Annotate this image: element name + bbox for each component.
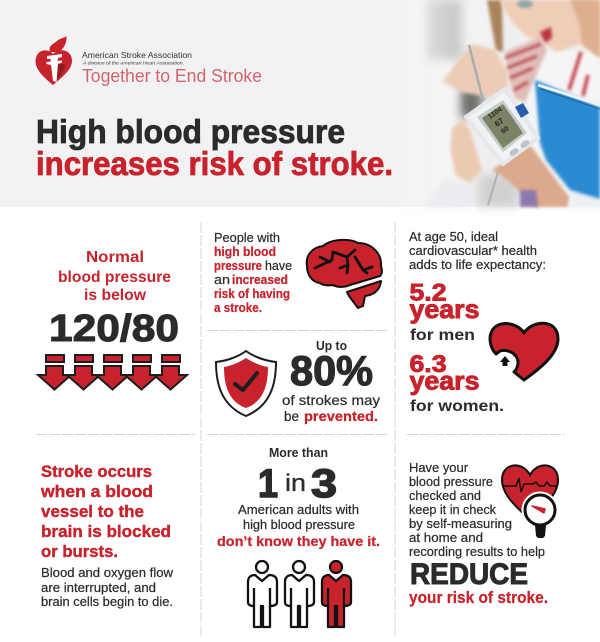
text: of strokes may be prevented: be xyxy=(284,408,299,424)
text: stroke occurs when: when a blood xyxy=(40,482,153,501)
text: of strokes may be prevented xyxy=(282,392,380,424)
logo tagline small: A division of the American Heart Association. xyxy=(82,60,184,66)
stat: 5.2 years for men xyxy=(410,280,480,344)
text: people with high blood pressure: high blood xyxy=(214,244,276,259)
panel: life expectancy xyxy=(409,229,558,415)
text: people with high blood pressure: have xyxy=(265,258,292,273)
icon: heart and torch xyxy=(36,36,72,85)
text: blood and oxygen: are interrupted, and xyxy=(41,580,156,595)
stat: 5.2 years for men: 5.2 xyxy=(410,280,446,306)
face xyxy=(499,0,600,58)
red stethoscope xyxy=(569,52,588,96)
monitor badge xyxy=(515,103,529,118)
lower right hand xyxy=(492,145,570,207)
text: american adults: high blood pressure xyxy=(243,517,355,532)
text: have your blood pressure checked: recording results to help xyxy=(409,544,545,559)
blue folder xyxy=(535,80,600,199)
text: american adults: don’t know they have it. xyxy=(217,533,380,549)
number: 1 in 3: in xyxy=(285,470,306,497)
monitor buttons xyxy=(508,147,520,157)
icon: brain xyxy=(307,240,382,308)
icon: down arrows xyxy=(38,355,187,390)
panel: stroke definition xyxy=(40,462,174,609)
text: more than: More than xyxy=(269,445,328,460)
text: stroke occurs when: Stroke occurs xyxy=(41,462,152,481)
text: people with high blood pressure: risk of having xyxy=(214,286,290,301)
text: have your blood pressure checked xyxy=(409,460,545,559)
icon: heart with arrow xyxy=(490,323,558,380)
text: blood and oxygen: brain cells begin to die. xyxy=(41,594,173,609)
stat: 6.3 years for women xyxy=(410,351,504,415)
stat: 6.3 years for women: years xyxy=(410,366,480,396)
header background xyxy=(0,0,600,207)
logo: American Stroke Association xyxy=(36,36,262,86)
striped model xyxy=(505,37,547,102)
title xyxy=(36,113,393,182)
cable xyxy=(488,172,498,205)
panel: self-measuring xyxy=(409,460,558,607)
text: people with high blood pressure: an xyxy=(214,272,230,287)
column and row dividers xyxy=(36,222,565,636)
text: normal blood pressure is below: is below xyxy=(84,287,147,304)
photo: woman holding blood pressure monitor xyxy=(390,0,600,207)
number: 80%: 80% xyxy=(290,347,373,394)
panel: normal blood pressure xyxy=(38,249,187,390)
stat: 5.2 years for men: for men xyxy=(410,327,475,344)
stat: 5.2 years for men: years xyxy=(410,294,480,324)
lower left hand xyxy=(450,120,482,183)
text: have your blood pressure checked: checked and xyxy=(409,488,481,503)
text: normal blood pressure is below xyxy=(58,249,171,304)
upper hand xyxy=(442,44,508,97)
photo: woman holding blood pressure monitor: 60 xyxy=(500,125,511,136)
text: stroke occurs when: or bursts. xyxy=(41,542,118,561)
photo: woman holding blood pressure monitor: 1104 xyxy=(487,106,504,121)
text: of strokes may be prevented: prevented. xyxy=(304,408,378,424)
text: your risk of stroke: your risk of stroke. xyxy=(409,588,548,607)
text: american adults xyxy=(217,502,380,549)
text: people with high blood pressure: increased xyxy=(232,272,288,287)
title: High blood pressure xyxy=(36,113,345,150)
text: of strokes may be prevented: of strokes may xyxy=(282,392,380,408)
panel: 1 in 3 xyxy=(217,445,380,627)
text: have your blood pressure checked: by self-measuring xyxy=(409,516,512,531)
text: stroke occurs when xyxy=(40,462,171,561)
text: have your blood pressure checked: Have your xyxy=(409,460,469,475)
icon: shield with check xyxy=(216,351,276,416)
text: people with high blood pressure: pressure xyxy=(214,258,262,273)
text: american adults: American adults with xyxy=(238,502,359,517)
text: up to: Up to xyxy=(316,338,347,353)
panel: increased risk xyxy=(214,230,382,315)
icon: three people xyxy=(248,561,351,627)
title: increases risk of stroke. xyxy=(36,145,393,182)
text: blood and oxygen xyxy=(41,565,174,609)
text: normal blood pressure is below: Normal xyxy=(86,249,144,266)
coat xyxy=(525,50,600,207)
photo: woman holding blood pressure monitor: 67 xyxy=(493,116,506,129)
text: have your blood pressure checked: at home and xyxy=(409,530,483,545)
logo wordmark: American Stroke Association xyxy=(82,50,192,60)
number: 1 in 3: 3 xyxy=(311,462,337,506)
stat: 6.3 years for women: 6.3 xyxy=(410,351,446,378)
icon: heart with gauge xyxy=(502,465,558,538)
monitor body xyxy=(466,89,538,164)
text: at age 50 intro: adds to life expectancy: xyxy=(409,257,546,272)
number: 1 in 3: 1 xyxy=(258,462,278,506)
text: normal blood pressure is below: blood pressure xyxy=(58,269,171,286)
panel: 80 percent preventable xyxy=(216,338,380,424)
text: at age 50 intro: cardiovascular* health xyxy=(409,243,537,258)
text: reduce: REDUCE xyxy=(410,558,528,591)
text: stroke occurs when: brain is blocked xyxy=(41,522,171,541)
text: at age 50 intro xyxy=(409,229,546,272)
text: people with high blood pressure xyxy=(214,230,292,315)
number: 120/80: 120/80 xyxy=(49,308,179,350)
hair xyxy=(487,0,503,52)
stat: 6.3 years for women: for women. xyxy=(410,398,504,415)
logo tagline: Together to End Stroke xyxy=(82,66,262,86)
text: people with high blood pressure: a stroke. xyxy=(214,300,262,315)
text: have your blood pressure checked: keep it in check xyxy=(409,502,496,517)
text: stroke occurs when: vessel to the xyxy=(41,502,144,521)
number: 1 in 3 xyxy=(258,462,337,506)
text: blood and oxygen: Blood and oxygen flow xyxy=(41,565,174,580)
monitor screen xyxy=(477,100,527,152)
text: people with high blood pressure: People with xyxy=(214,230,280,245)
text: have your blood pressure checked: blood pressure xyxy=(409,474,493,489)
text: at age 50 intro: At age 50, ideal xyxy=(409,229,498,244)
